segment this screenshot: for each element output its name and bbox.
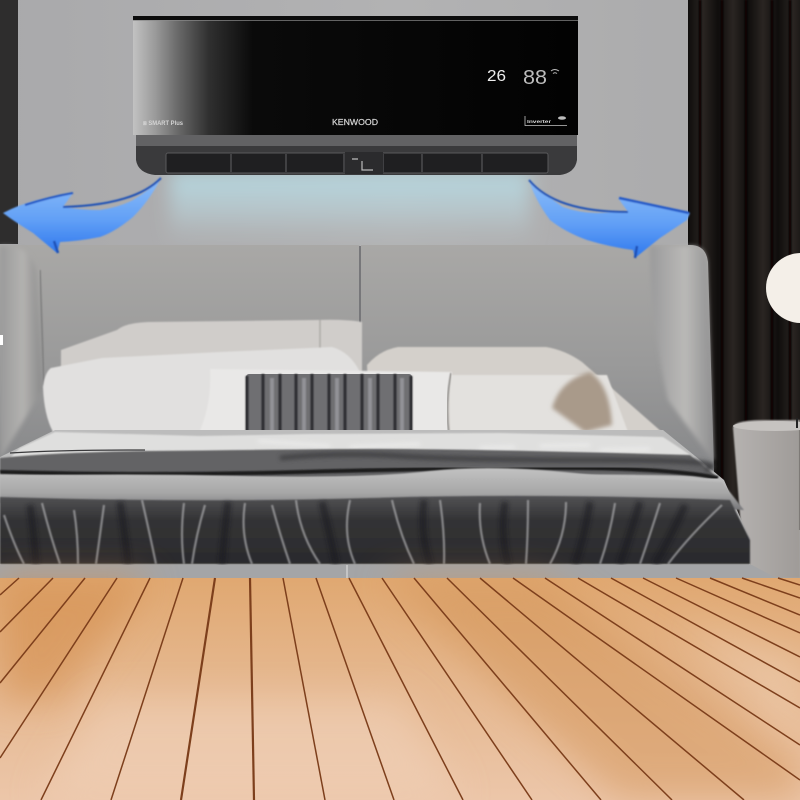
brand name: KENWOOD xyxy=(332,117,378,127)
inverter badge xyxy=(525,116,567,126)
bedside table xyxy=(733,418,800,578)
bedside lamp xyxy=(766,253,800,323)
air conditioner unit xyxy=(133,16,578,175)
front cushion xyxy=(198,369,452,436)
pampas beige accent xyxy=(552,372,612,432)
dark draped side xyxy=(0,496,750,564)
body lower xyxy=(136,136,577,175)
dark shadow folds xyxy=(30,500,685,564)
dark throw blanket xyxy=(0,449,716,477)
wall xyxy=(0,0,800,600)
right dark curtain xyxy=(688,0,800,530)
cool air glow xyxy=(170,172,530,250)
secondary digits: 88 xyxy=(523,67,547,89)
front panel xyxy=(133,17,578,135)
bed base xyxy=(0,565,776,578)
drape folds xyxy=(4,500,722,564)
temperature digits: 26 xyxy=(487,68,506,85)
inverter badge: Inverter xyxy=(527,119,551,124)
headboard xyxy=(0,245,714,480)
arrow: left airflow xyxy=(3,178,161,253)
left white pillow xyxy=(43,347,360,434)
bed linen xyxy=(0,430,750,566)
left dark curtain strip xyxy=(0,0,18,244)
floor plank lines xyxy=(0,578,800,800)
vent xyxy=(166,152,548,174)
linen wrinkles xyxy=(258,441,650,450)
right white pillow xyxy=(449,375,628,436)
display readout xyxy=(487,67,547,89)
back pillows xyxy=(61,320,663,440)
arrow: right airflow xyxy=(529,180,690,258)
smart label: ⧈ SMART Plus xyxy=(143,121,184,127)
icon: wifi xyxy=(551,70,559,74)
wooden floor xyxy=(0,578,800,800)
light duvet top xyxy=(0,468,744,510)
